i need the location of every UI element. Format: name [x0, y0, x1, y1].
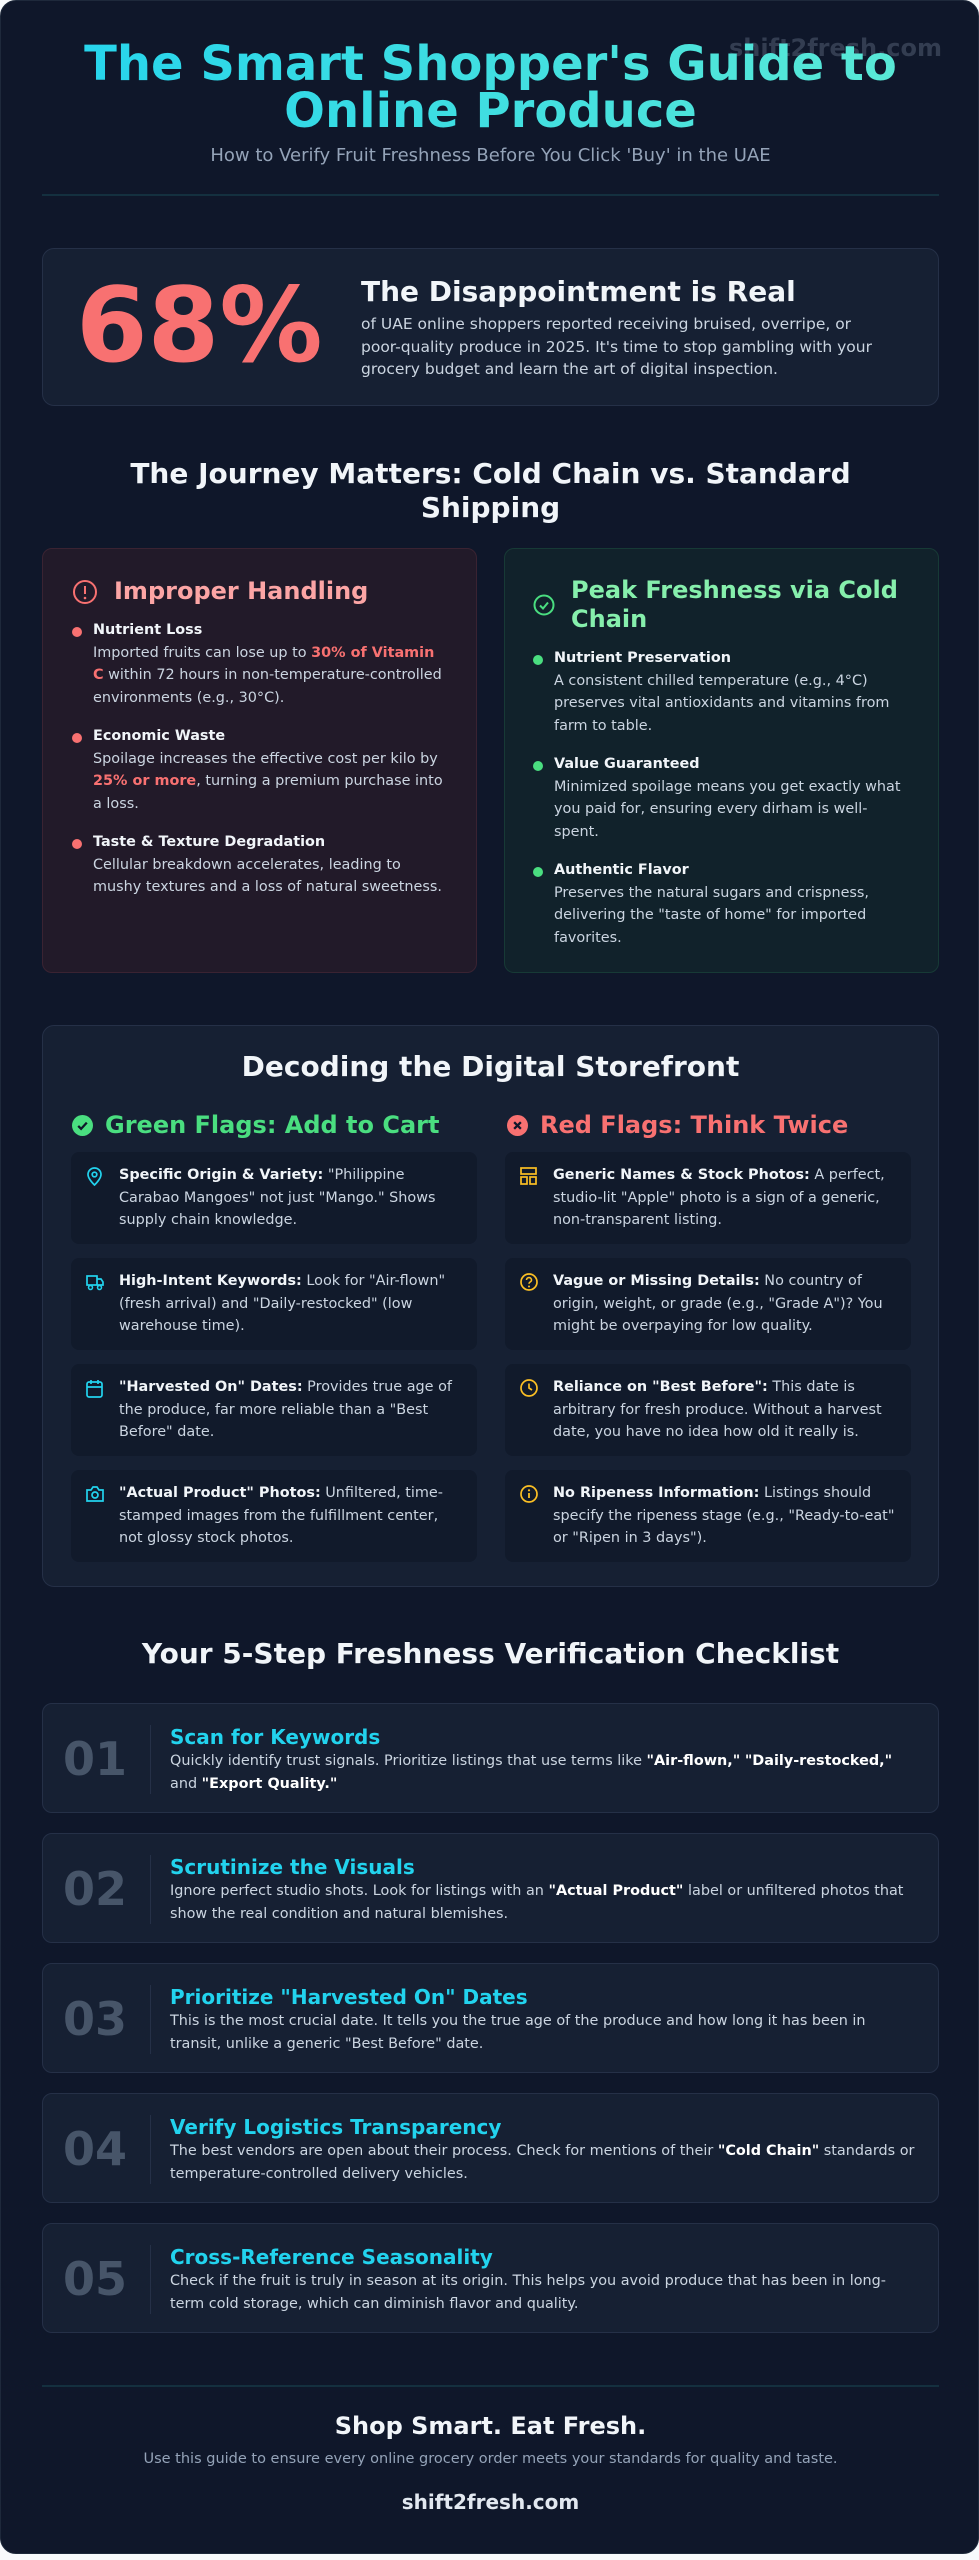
footer: shift2fresh.com: [402, 2490, 579, 2514]
panel: cold chain: [504, 548, 939, 973]
card: origin: Specific Origin & Variety: "Philippine Carabao Mangoes" not just "Mango." Shows supply chain knowledge.: [119, 1167, 436, 1228]
item: nutrient loss: [72, 622, 442, 706]
card: best before: [505, 1364, 911, 1456]
step 04: Verify Logistics Transparency: [170, 2115, 501, 2139]
card: generic names: [505, 1152, 911, 1244]
step 02: Ignore perfect studio shots. Look for listings with an "Actual Product" label or unfiltered photos that show the real condition and natural blemishes.: [170, 1883, 903, 1922]
step 01: Scan for Keywords: [170, 1725, 380, 1749]
subheading: red flags: Red Flags: Think Twice: [540, 1111, 848, 1139]
heading: peak freshness: Peak Freshness via Cold Chain: [571, 576, 898, 633]
step 04: [42, 2093, 939, 2203]
card: vague details: [505, 1258, 911, 1350]
item: economic waste: Spoilage increases the effective cost per kilo by 25% or more, turning a premium purchase into a loss.: [93, 750, 443, 812]
step 01: [42, 1703, 939, 1813]
item: nutrient loss: Imported fruits can lose up to 30% of Vitamin C within 72 hours in non-temperature-controlled environments (e.g., 30°C).: [93, 644, 442, 706]
item: flavor: [533, 862, 869, 946]
card: ripeness: No Ripeness Information: Listings should specify the ripeness stage (e.g., "Ready-to-eat" or "Ripen in 3 days").: [553, 1485, 894, 1546]
item: nutrient loss: Nutrient Loss: [93, 622, 202, 638]
step 04: The best vendors are open about their process. Check for mentions of their "Cold Chain" standards or temperature-controlled delivery vehicles.: [170, 2143, 914, 2182]
footer: Shop Smart. Eat Fresh.: [335, 2412, 646, 2440]
icon: alert: [73, 580, 97, 604]
item: flavor: Preserves the natural sugars and crispness, delivering the "taste of home" for imported favorites.: [554, 884, 869, 946]
step 05: 05: [63, 2252, 127, 2306]
big stat 68%: 68%: [76, 266, 323, 386]
step 01: 01: [63, 1732, 127, 1786]
heading: improper handling: Improper Handling: [114, 577, 368, 605]
card: actual photos: [71, 1470, 477, 1562]
card: actual photos: "Actual Product" Photos: Unfiltered, time-stamped images from the fulfillment center, not glossy stock photos.: [119, 1485, 443, 1546]
item: economic waste: Economic Waste: [93, 728, 225, 744]
step 03: Prioritize "Harvested On" Dates: [170, 1985, 528, 2009]
stat heading: The Disappointment is Real: [361, 275, 796, 308]
step 02: 02: [63, 1862, 127, 1916]
step 02: [42, 1833, 939, 1943]
item: nutrient preservation: Nutrient Preservation: [554, 650, 731, 666]
step 05: [42, 2223, 939, 2333]
title: The Smart Shopper's Guide to: [84, 36, 897, 92]
card: best before: Reliance on "Best Before": This date is arbitrary for fresh produce. Without a harvest date, you have no idea how old it really is.: [553, 1379, 882, 1440]
step 05: Cross-Reference Seasonality: [170, 2245, 493, 2269]
item: taste: [72, 834, 442, 895]
card: origin: [71, 1152, 477, 1244]
card: generic names: Generic Names & Stock Photos: A perfect, studio-lit "Apple" photo is a sign of a generic, non-transparent listing.: [553, 1167, 885, 1228]
step 03: 03: [63, 1992, 127, 2046]
subtitle: How to Verify Fruit Freshness Before You Click 'Buy' in the UAE: [210, 145, 771, 166]
item: flavor: Authentic Flavor: [554, 862, 689, 878]
card: harvested dates: [71, 1364, 477, 1456]
heading: journey: Shipping: [421, 491, 560, 524]
card: ripeness: [505, 1470, 911, 1562]
footer: Use this guide to ensure every online grocery order meets your standards for quality and taste.: [143, 2451, 838, 2467]
item: nutrient preservation: A consistent chilled temperature (e.g., 4°C) preserves vital antioxidants and vitamins from farm to table.: [554, 672, 889, 734]
card: keywords: [71, 1258, 477, 1350]
card: vague details: Vague or Missing Details: No country of origin, weight, or grade (e.g., "Grade A")? You might be overpaying for low quality.: [553, 1273, 883, 1334]
heading: decoding: Decoding the Digital Storefront: [242, 1050, 739, 1083]
card: keywords: High-Intent Keywords: Look for "Air-flown" (fresh arrival) and "Daily-restocked" (low warehouse time).: [119, 1273, 445, 1334]
heading: journey: The Journey Matters: Cold Chain vs. Standard: [130, 457, 851, 490]
step 01: Quickly identify trust signals. Prioritize listings that use terms like "Air-flown," "Daily-restocked," and "Export Quality.": [170, 1753, 892, 1792]
item: taste: Taste & Texture Degradation: [93, 834, 325, 850]
step 03: [42, 1963, 939, 2073]
panel: digital storefront: [42, 1025, 939, 1587]
stat text: of UAE online shoppers reported receiving bruised, overripe, or poor-quality produce in 2025. It's time to stop gambling with your grocery budget and learn the art of digital inspection.: [361, 315, 872, 378]
heading: checklist: Your 5-Step Freshness Verification Checklist: [142, 1637, 839, 1670]
item: value: Value Guaranteed: [554, 756, 700, 772]
item: value: Minimized spoilage means you get exactly what you paid for, ensuring every dirham is well-spent.: [554, 778, 901, 840]
card: harvested dates: "Harvested On" Dates: Provides true age of the produce, far more reliable than a "Best Before" date.: [119, 1379, 452, 1440]
item: value: [533, 756, 901, 840]
subheading: green flags: Green Flags: Add to Cart: [105, 1111, 440, 1139]
item: taste: Cellular breakdown accelerates, leading to mushy textures and a loss of natural sweetness.: [93, 856, 442, 895]
step 03: This is the most crucial date. It tells you the true age of the produce and how long it has been in transit, unlike a generic "Best Before" date.: [170, 2013, 866, 2052]
title: [1, 41, 979, 135]
step 04: 04: [63, 2122, 127, 2176]
footer: [143, 2412, 838, 2514]
heading: journey: [130, 457, 851, 524]
stat panel: [42, 248, 939, 406]
item: nutrient preservation: [533, 650, 889, 734]
item: economic waste: [72, 728, 443, 812]
step 02: Scrutinize the Visuals: [170, 1855, 415, 1879]
title: Online Produce: [284, 83, 697, 139]
watermark: shift2fresh.com: [729, 34, 942, 62]
icon: check circle: [534, 594, 554, 616]
step 05: Check if the fruit is truly in season at its origin. This helps you avoid produce that has been in long-term cold storage, which can diminish flavor and quality.: [170, 2273, 886, 2312]
panel: improper handling: [42, 548, 477, 973]
